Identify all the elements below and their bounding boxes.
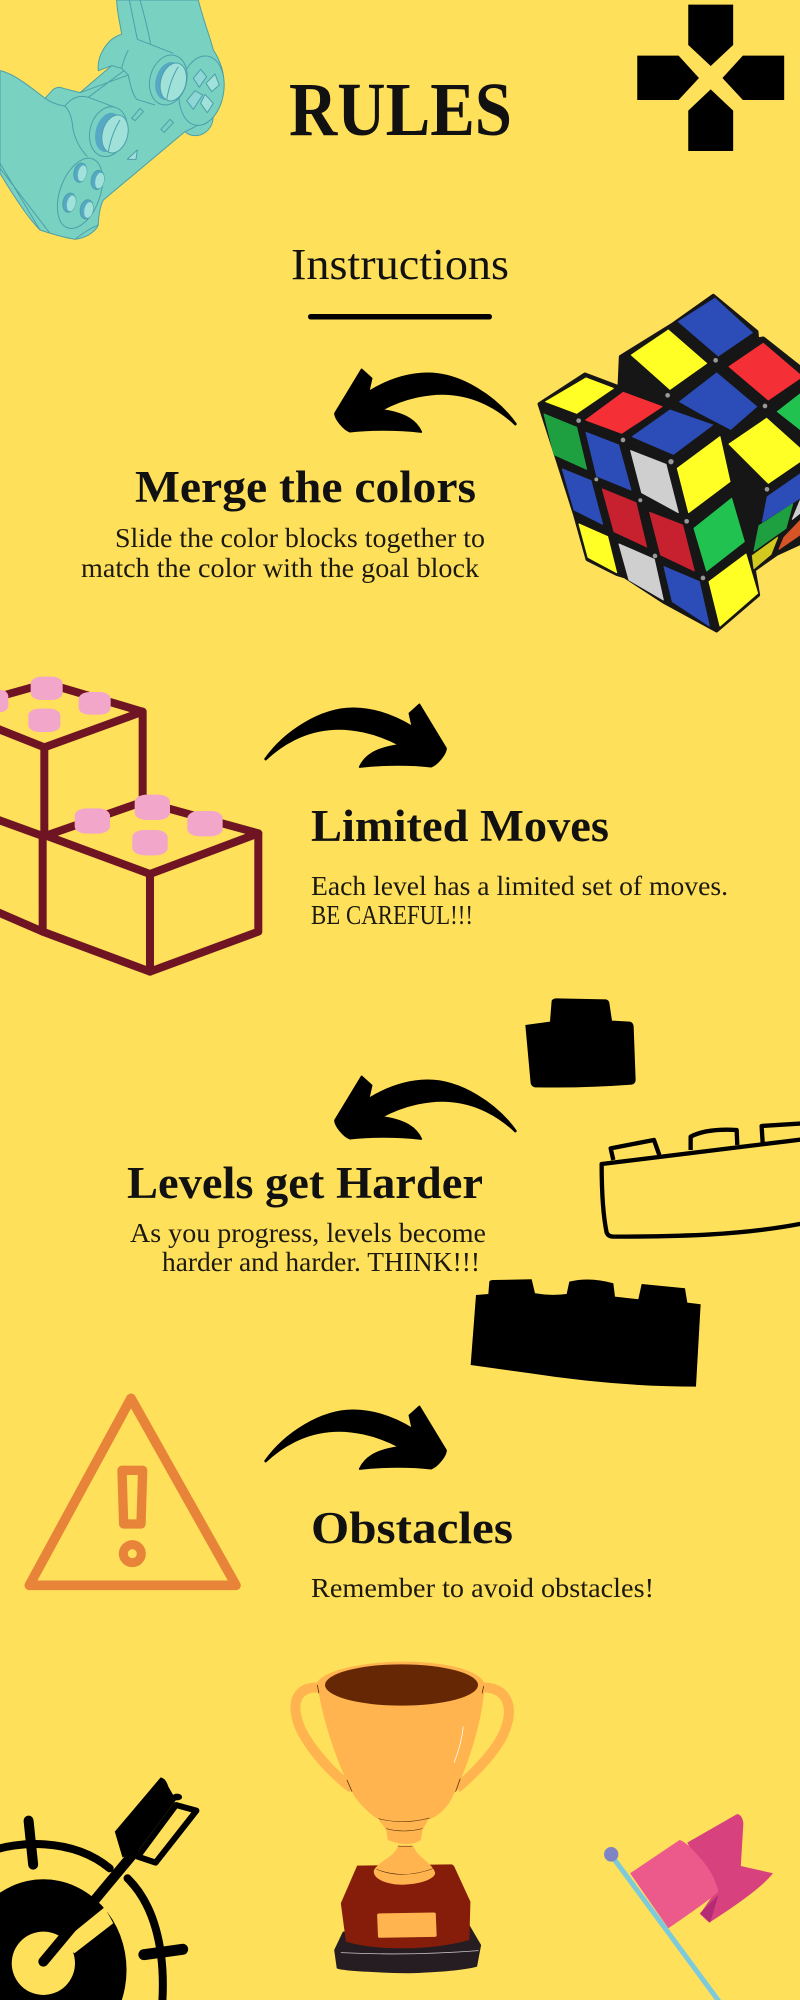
text: merge the colors description [81, 523, 485, 583]
subtitle underline [308, 314, 492, 320]
title: RULES [289, 68, 512, 152]
icon: d-pad cross [637, 5, 784, 151]
icon: trophy [295, 1662, 509, 1973]
arrow: right pointing [265, 704, 446, 767]
text: levels get harder description: As you progress, levels become [130, 1218, 486, 1248]
text: limited moves description: BE CAREFUL!!! [311, 900, 473, 930]
icon: warning triangle [29, 1398, 236, 1585]
text: levels get harder description [130, 1218, 486, 1277]
heading: merge the colors: Merge the colors [135, 462, 476, 512]
icon: target with arrow [0, 1777, 196, 2000]
icon: game controller [0, 0, 229, 239]
heading: obstacles: Obstacles [311, 1503, 513, 1553]
icon: outline brick [602, 1123, 800, 1237]
text: merge the colors description: match the color with the goal block [81, 553, 480, 583]
icon: pink flag [604, 1814, 773, 2000]
heading: limited moves: Limited Moves [311, 801, 609, 851]
heading: levels get harder: Levels get Harder [127, 1158, 483, 1208]
icon: stacked outline bricks [0, 677, 258, 972]
icon: small black brick [525, 998, 636, 1088]
icon: rubik's cube [539, 296, 800, 631]
subtitle: Instructions [291, 240, 509, 289]
arrow: right pointing [265, 1406, 446, 1469]
text: limited moves description: Each level has a limited set of moves. [311, 871, 728, 901]
icon: large black brick [471, 1279, 701, 1387]
text: limited moves description [311, 871, 728, 930]
arrow: left pointing [335, 1076, 516, 1139]
text: merge the colors description: Slide the color blocks together to [115, 523, 485, 553]
text: levels get harder description: harder and harder. THINK!!! [162, 1247, 480, 1277]
arrow: left pointing [335, 369, 516, 432]
text: obstacles description: Remember to avoid obstacles! [311, 1573, 654, 1603]
